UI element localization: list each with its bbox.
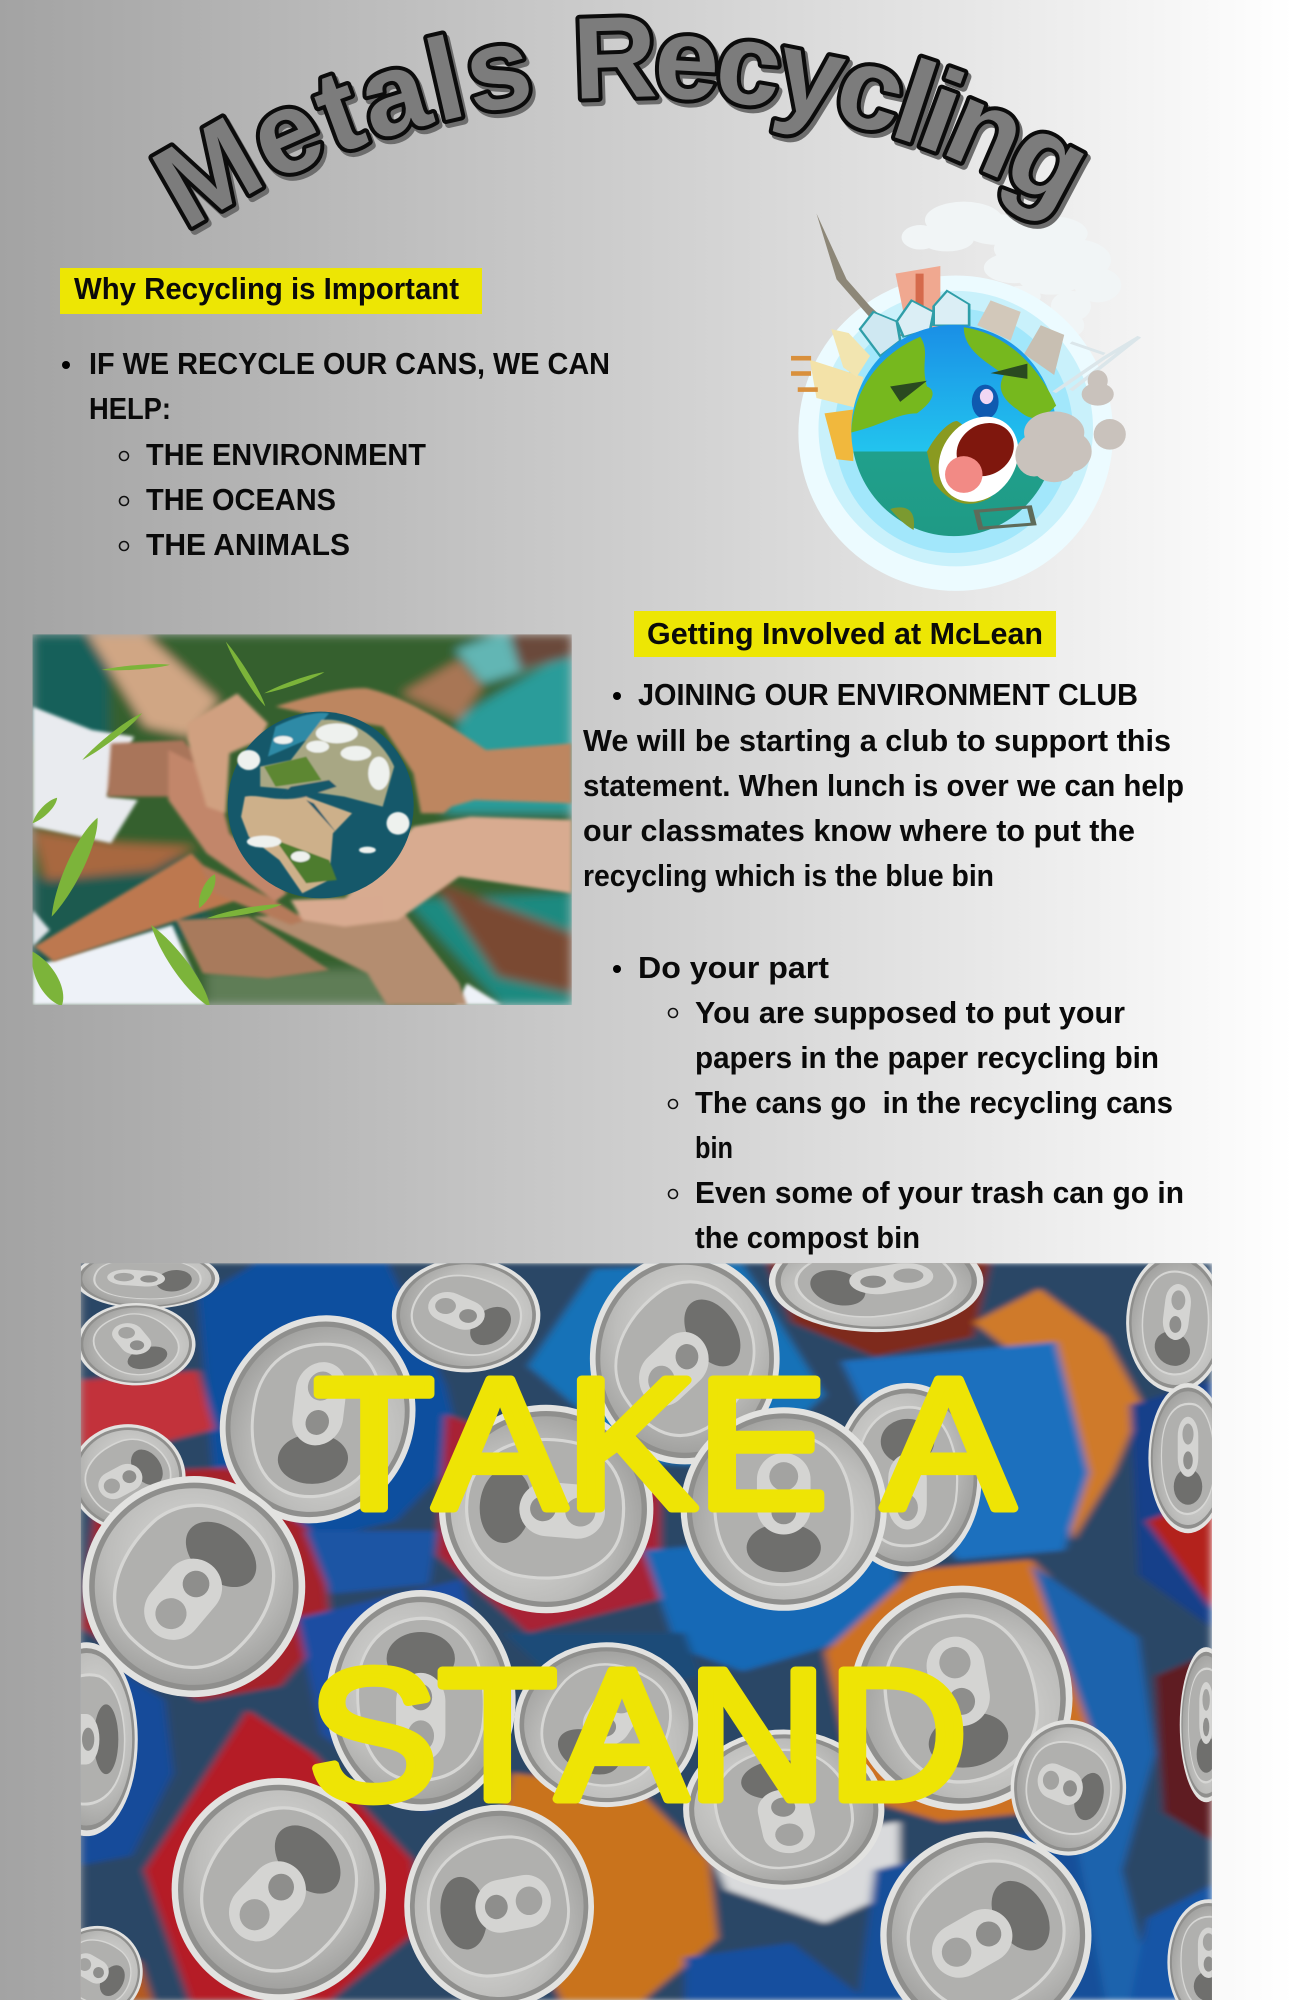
white sleeves: [33, 707, 501, 1005]
text block: environment club: statement. When lunch is over we can help: [583, 768, 1184, 803]
photo: hands holding the earth: [23, 634, 572, 1011]
arms and hands: [34, 688, 572, 1005]
text block: do your part: bin: [695, 1130, 733, 1165]
text block: do your part: the compost bin: [695, 1220, 920, 1255]
heading highlight: why recycling is important: Why Recycling is Important: [74, 271, 459, 306]
earth globe: [851, 325, 1056, 536]
text block: do your part: Even some of your trash can go in: [695, 1175, 1184, 1210]
bullet list: why recycling: HELP:: [89, 391, 171, 426]
text block: do your part: [613, 950, 1184, 1255]
halo rings: [798, 276, 1113, 591]
bullet list: why recycling: THE ANIMALS: [146, 527, 350, 562]
silver can tops: [80, 1263, 1212, 2000]
text block: environment club: [583, 677, 1184, 893]
icon: crying earth with city and pollution: [791, 202, 1139, 591]
miniature globe: [228, 712, 414, 898]
text block: environment club: recycling which is the blue bin: [583, 858, 994, 893]
face: eyes and mouth: [890, 364, 1034, 528]
blurred background: [33, 634, 572, 1005]
text block: environment club: our classmates know where to put the: [583, 813, 1135, 848]
text block: do your part: papers in the paper recycling bin: [695, 1040, 1159, 1075]
text block: do your part: You are supposed to put your: [695, 995, 1125, 1030]
wind turbine: [1054, 337, 1139, 392]
crumpled colored can bodies: [81, 1263, 1212, 2000]
text block: environment club: JOINING OUR ENVIRONMENT CLUB: [638, 677, 1138, 712]
bullet list: why recycling: [62, 346, 610, 562]
heading highlight: getting involved: Getting Involved at McLean: [647, 616, 1043, 651]
city buildings: [791, 266, 1064, 461]
grey pollution clouds: [1015, 370, 1126, 482]
slogan: take a stand: TAKE A: [314, 1341, 1014, 1548]
white smoke clouds: [902, 202, 1121, 337]
green leaves: [23, 640, 325, 1011]
slogan: take a stand: [308, 1341, 1014, 1839]
text block: do your part: The cans go in the recycling cans: [695, 1085, 1173, 1120]
bullet list: why recycling: THE OCEANS: [146, 482, 336, 517]
continents: [851, 327, 1056, 530]
slogan: take a stand: STAND: [308, 1632, 968, 1839]
bullet list: why recycling: THE ENVIRONMENT: [146, 437, 426, 472]
text block: environment club: We will be starting a club to support this: [583, 723, 1171, 758]
text block: do your part: Do your part: [638, 950, 829, 985]
bullet list: why recycling: IF WE RECYCLE OUR CANS, WE CAN: [89, 346, 610, 381]
photo: crushed aluminium cans: [80, 1263, 1212, 2000]
radio tower: [816, 214, 904, 337]
